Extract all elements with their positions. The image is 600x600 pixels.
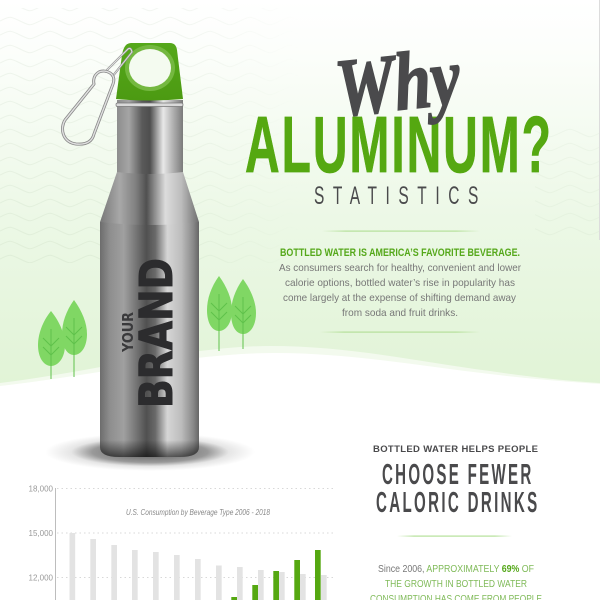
section kicker: BOTTLED WATER HELPS PEOPLE [373,444,538,455]
pale hill band [0,346,600,420]
y axis labels: 12,000 [29,574,54,582]
neck ring [116,103,183,106]
section title line 2: CALORIC DRINKS [376,486,537,518]
bottle body [100,222,199,457]
intro line 1: As consumers search for healthy, convenient and lower [279,262,521,274]
intro text block [279,247,521,319]
divider [320,332,480,333]
tree 3 [207,276,232,351]
subtitle: STATISTICS: STATISTICS [314,182,478,210]
statistic text block [370,563,542,600]
bottle base shade [100,440,199,457]
intro line 3: come largely at the expense of shifting demand away [283,292,517,304]
intro line 2: calorie options, bottled water’s rise in popularity has [285,277,515,289]
green bars [231,550,321,600]
statistic line 1: Since 2006, APPROXIMATELY 69% OF [378,563,534,575]
title: Why: Why [331,30,465,134]
aluminum bottle [100,43,199,457]
section heading block [373,444,538,518]
section title line 1: CHOOSE FEWER [382,458,531,490]
statistic line 2: THE GROWTH IN BOTTLED WATER [385,578,527,590]
title: ALUMINUM?: ALUMINUM? [245,99,551,189]
bar chart: U.S. consumption by beverage type [29,484,336,600]
tree 1 [38,311,65,379]
cap ring [125,45,175,91]
grey bars [70,533,327,600]
bottle neck [117,100,183,176]
your label: YOUR [119,312,137,353]
white hill [0,353,600,600]
background wave pattern left [0,8,224,263]
y axis labels: 18,000 [29,484,54,494]
background gradient [0,0,600,400]
bottle shoulder [100,172,199,225]
divider [397,536,512,537]
intro line 4: from soda and fruit drinks. [342,307,458,319]
right edge line [599,0,600,240]
chart y axis [54,488,56,600]
cap hole [129,49,171,87]
y axis labels [29,484,54,582]
brand name: BRAND [130,258,183,408]
chart gridlines [57,488,336,578]
tree 2 [62,300,87,377]
chart title: U.S. Consumption by Beverage Type 2006 - 2018 [126,508,270,517]
tree 4 [231,279,256,349]
background wave pattern right [535,128,600,240]
intro heading: BOTTLED WATER IS AMERICA’S FAVORITE BEVERAGE. [280,247,520,259]
bottle shadow [45,433,255,471]
divider [322,230,480,232]
y axis labels: 15,000 [29,529,54,538]
carabiner clip [63,48,132,144]
tree group right [207,276,256,351]
tree group left [38,300,87,379]
green cap [116,43,183,100]
